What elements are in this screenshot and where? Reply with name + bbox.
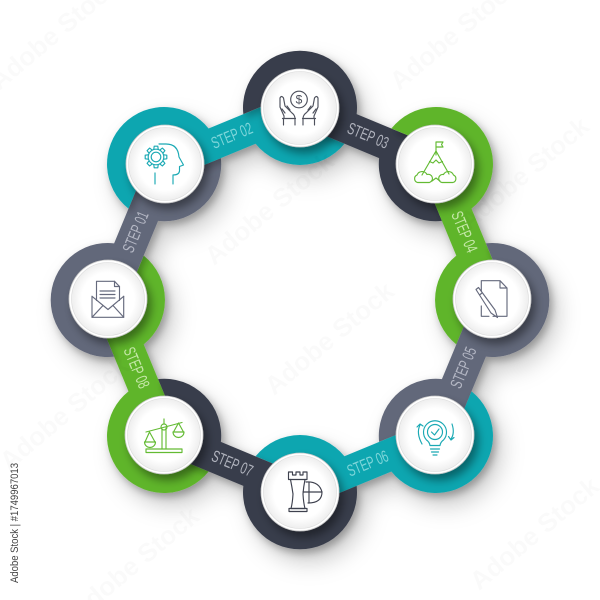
connector: step 03 dark [228,25,469,267]
node: balance scale [125,396,203,474]
node: chess rook and chart [261,453,339,531]
node: hands holding coin [261,69,339,147]
connector: step 02 teal [107,105,344,209]
node: mountain with flag [396,125,474,203]
label: step 07: STEP 07 [209,447,255,480]
label: step 03: STEP 03 [345,120,391,153]
icon: rook with pie chart [288,472,322,512]
icon: hands and dollar coin: $ [296,93,303,107]
node: document and pen [453,260,531,338]
node: envelope with letter [69,260,147,338]
label: step 08: STEP 08 [120,345,153,391]
connector: step 04 green [391,107,495,344]
stock id caption: Adobe Stock | #1749967013 [9,463,21,583]
label: step 04: STEP 04 [447,209,480,255]
node: light bulb with check [396,396,474,474]
label: step 02: STEP 02 [209,120,255,153]
node: head with gear [126,125,204,203]
connector: step 07 dark [131,333,372,575]
icon: envelope with letter [92,281,124,317]
icon: mountain flag clouds [415,142,456,182]
connector: step 08 green [105,256,209,493]
connector: step 01 gray [25,131,267,372]
icon: bulb with check and arrows [417,421,454,455]
label: step 01: STEP 01 [120,209,153,255]
icon: balance scale [144,419,184,452]
label: step 05: STEP 05 [447,345,480,391]
label: step 06: STEP 06 [345,447,391,480]
connector: step 06 teal [256,391,493,495]
icon: head and gear [145,144,184,184]
icon: document and pen [476,281,507,318]
connector: step 05 gray [333,228,575,469]
